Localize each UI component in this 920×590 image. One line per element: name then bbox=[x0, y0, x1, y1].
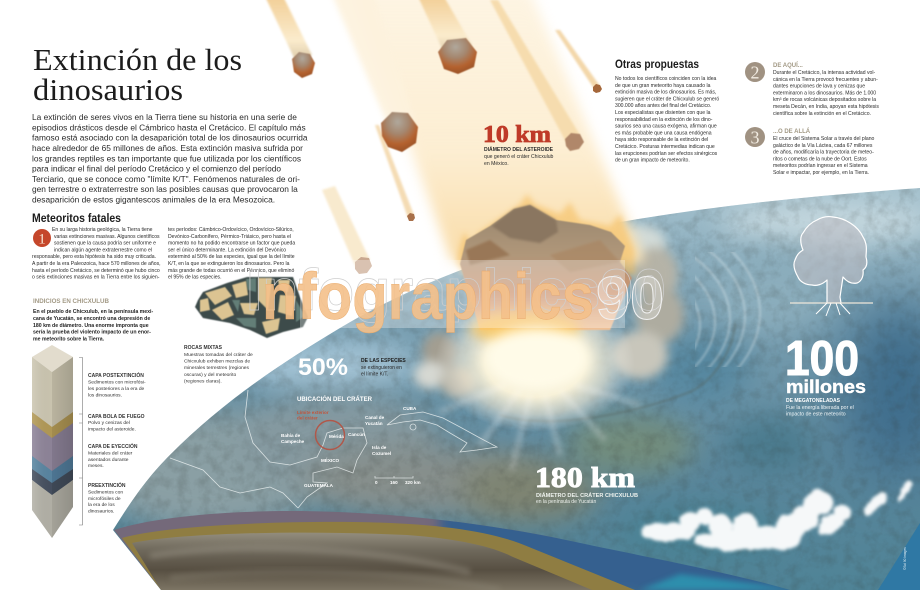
stratigraphic column bbox=[32, 345, 73, 538]
title bbox=[33, 42, 242, 107]
bracket for column layers bbox=[79, 358, 82, 525]
text column 1: hasta el período Cretácico, se determinó que hubo cinco bbox=[32, 268, 160, 274]
icon: number 1 badge bbox=[33, 229, 51, 248]
crater circle bbox=[316, 420, 344, 450]
text: Rocas mixtas: minerales terrestres (regiones bbox=[184, 365, 250, 371]
callout: 180 km: en la península de Yucatán bbox=[536, 499, 596, 505]
callout: 100 millones: Fue la energía liberada por el bbox=[786, 405, 854, 411]
intro text block: desaparición de estos gigantescos animales de la era Mesozoica. bbox=[32, 194, 275, 204]
place labels: GUATEMALA bbox=[304, 483, 334, 488]
text: De aquí: cánica en la Tierra provocó frecuentes y abun- bbox=[773, 77, 878, 83]
label: preextinción: PREEXTINCIÓN bbox=[88, 481, 126, 489]
panel: Earth surface with ocean and land bbox=[90, 180, 920, 590]
label: capa postextinción: los dinosaurios. bbox=[88, 392, 122, 398]
text: Rocas mixtas: (regiones claras). bbox=[184, 378, 222, 384]
place labels: 320 km bbox=[405, 480, 421, 485]
rock sample: mixed rocks bbox=[195, 277, 308, 338]
text column 2: ser el único determinante. La extinción del Devónico bbox=[168, 247, 286, 253]
place labels: Cancún bbox=[348, 432, 365, 437]
place labels: MÉXICO bbox=[321, 456, 340, 463]
intro text block: episodios drásticos desde el Cámbrico hasta el Cretácico. El capítulo más bbox=[32, 122, 306, 132]
label: preextinción: la era de los bbox=[88, 502, 115, 508]
watermark band and text: nfographics bbox=[262, 259, 594, 333]
icon: number 2 badge: 2 bbox=[750, 62, 760, 82]
text: O de allá: de años, modificaría la trayectoria de meteo- bbox=[773, 150, 874, 156]
label: capa de eyección: Materiales del cráter bbox=[88, 450, 133, 456]
label: preextinción: microfósiles de bbox=[88, 496, 121, 502]
text: Rocas mixtas bbox=[0, 0, 260, 384]
crater limit label: del cráter bbox=[297, 416, 318, 420]
text column 2: tes períodos: Cámbrico-Ordovícico, Ordovícico-Silúrico, bbox=[168, 227, 294, 233]
label: capa de eyección bbox=[88, 442, 138, 469]
light beams of falling asteroids bbox=[262, 0, 645, 268]
text: Otras propuestas: responsabilidad en la extinción de los dino- bbox=[615, 117, 713, 123]
label: capa bola de fuego: impacto del asteroide. bbox=[88, 426, 136, 432]
icon: meteor 3 bbox=[438, 38, 477, 74]
text column 2: el 95% de las especies. bbox=[168, 275, 222, 281]
place labels: Yucatán bbox=[365, 421, 383, 426]
watermark band and text: Infographics90 bbox=[246, 258, 666, 323]
icon: meteor 5 bbox=[593, 84, 602, 93]
place labels: Cozumel bbox=[372, 451, 391, 456]
text: De aquí: científica sobre la extinción en el Cretácico. bbox=[773, 111, 871, 117]
crater rim bbox=[500, 323, 735, 421]
label: capa de eyección: asentados durante bbox=[88, 457, 129, 463]
intro text block: hace alrededor de 65 millones de años. Esta extinción masiva sufrida por bbox=[32, 143, 303, 153]
callout: 100 millones: 100 bbox=[785, 332, 859, 386]
callout: 180 km: DIÁMETRO DEL CRÁTER CHICXULUB bbox=[536, 492, 638, 499]
impact explosion bbox=[440, 312, 628, 430]
map heading: UBICACIÓN DEL CRÁTER bbox=[297, 395, 373, 403]
smoke clouds bbox=[414, 225, 684, 398]
text column 1: responsable, pero esta hipótesis ha sido muy criticada. bbox=[32, 254, 156, 260]
label: capa bola de fuego: CAPA BOLA DE FUEGO bbox=[88, 414, 145, 420]
text: De aquí: Durante el Cretácico, la intensa actividad vol- bbox=[773, 70, 876, 76]
text: Otras propuestas: es más probable que una causa endógena bbox=[615, 130, 712, 136]
heading: De aquí: DE AQUÍ... bbox=[773, 61, 803, 69]
text: O de allá: meteoritos podrían ingresar en el Sistema bbox=[773, 163, 868, 169]
text column 2: Devónico-Carbonífero, Pérmico-Triásico, pero hasta el bbox=[168, 234, 291, 240]
label: preextinción: Sedimentos con bbox=[88, 489, 123, 495]
callout: 50 percent: 50% bbox=[298, 354, 348, 381]
text: Chicxulub description: me meteorito sobre la Tierra. bbox=[33, 336, 105, 342]
icon: mushroom cloud bbox=[790, 217, 873, 316]
callout: 100 millones: DE MEGATONELADAS bbox=[786, 398, 841, 404]
text: Chicxulub description: 180 km de diámetro. Una enorme impronta que bbox=[33, 323, 149, 329]
callout: 100 millones bbox=[785, 332, 866, 418]
intro text block: para indicar el final del período Cretácico y el comienzo del período bbox=[32, 164, 281, 174]
title: dinosaurios bbox=[33, 72, 183, 107]
text column 1: indican algún agente extraterrestre como el bbox=[54, 247, 152, 253]
intro text block: Terciario, que se conoce como "límite K/T". Fenómenos naturales de ori- bbox=[32, 174, 300, 184]
crater limit label: Límite exterior bbox=[297, 410, 329, 415]
text: O de allá: ritos o cometas de la nube de Oort. Estos bbox=[773, 156, 867, 162]
callout: 180 km bbox=[535, 463, 638, 505]
text: De aquí: meseta Decán, en India, apoyan esta hipótesis bbox=[773, 104, 879, 110]
heading: Indicios en Chicxulub: INDICIOS EN CHICXULUB bbox=[33, 299, 110, 305]
fireball below the asteroid bbox=[470, 312, 580, 344]
text: Otras propuestas: haya sido responsable de la extinción del bbox=[615, 137, 708, 143]
intro text block: los grandes reptiles es tan importante que fue utilizada por los científicos bbox=[32, 153, 301, 163]
callout: 50 percent: DE LAS ESPECIES bbox=[361, 358, 406, 364]
icon: number 3 badge: 3 bbox=[750, 128, 760, 148]
place labels: Isla de bbox=[372, 445, 386, 450]
text: De aquí: exterminaron a los dinosaurios. Más de 1.000 bbox=[773, 90, 876, 96]
text: Chicxulub description: sería la prueba del violento impacto de un enor- bbox=[33, 330, 151, 336]
icon: number 3 badge bbox=[745, 127, 765, 148]
text: Otras propuestas: Los especialistas que disienten con que la bbox=[615, 110, 711, 116]
text: De aquí: km³ de rocas volcánicas depositados sobre la bbox=[773, 97, 876, 103]
text: O de allá: Solar e impactar, por ejemplo, en la Tierra. bbox=[773, 170, 869, 176]
text: Rocas mixtas: Muestras tomadas del cráter de bbox=[184, 352, 253, 358]
place labels: Canal de bbox=[365, 415, 384, 420]
label: capa bola de fuego bbox=[88, 414, 145, 432]
callout: 100 millones: millones bbox=[786, 377, 866, 397]
intro text block: famoso está asociado con la desaparición total de los dinosaurios ocurrida bbox=[32, 133, 308, 143]
icon: number 2 badge bbox=[745, 62, 765, 82]
map of crater location bbox=[170, 390, 497, 508]
callout: 10 km: DIÁMETRO DEL ASTEROIDE bbox=[484, 146, 554, 153]
text: Chicxulub description: En el pueblo de Chicxulub, en la península mexi- bbox=[33, 309, 153, 315]
text: O de allá: El cruce del Sistema Solar a través del plano bbox=[773, 136, 875, 142]
icon: number 1 badge: 1 bbox=[38, 232, 46, 248]
text column 1: En su larga historia geológica, la Tierra tiene bbox=[52, 227, 153, 233]
place labels: CUBA bbox=[403, 406, 417, 411]
heading: O de allá: ...O DE ALLÁ bbox=[773, 128, 811, 135]
fireball core bbox=[485, 328, 589, 388]
text column 2: más grande de todas ocurrió en el Pérmico, que eliminó bbox=[168, 268, 294, 274]
credit: ©Sol 90 Images bbox=[903, 547, 907, 570]
icon: meteor 7 bbox=[355, 257, 372, 274]
label: preextinción bbox=[88, 481, 126, 514]
text: Otras propuestas: saurios sea una causa exógena, afirman que bbox=[615, 124, 717, 130]
label: capa postextinción: Sedimentos con microfósi- bbox=[88, 379, 146, 385]
intro text block: gen terrestre o extraterrestre son las posibles causas que provocaron la bbox=[32, 184, 298, 194]
text: Otras propuestas: 300.000 años antes del final del Cretácico. bbox=[615, 103, 711, 109]
text: Otras propuestas: extinción masiva de los dinosaurios. Es más, bbox=[615, 90, 716, 96]
place labels: Bahía de bbox=[281, 433, 300, 438]
text column 2: exterminó al 50% de las especies, igual que la del límite bbox=[168, 254, 295, 260]
icon: meteor 4 bbox=[565, 133, 584, 151]
text: Otras propuestas: No todos los científicos coinciden con la idea bbox=[615, 76, 717, 82]
ripple rings bbox=[695, 252, 762, 367]
large asteroid bbox=[460, 205, 632, 330]
label: capa postextinción: les posteriores a la era de bbox=[88, 386, 145, 392]
text: Otras propuestas: Cretácico. Posturas intermedias indican que bbox=[615, 144, 715, 150]
text: Chicxulub description: cana de Yucatán, se encontró una depresión de bbox=[33, 316, 150, 322]
callout: 50 percent: se extinguieron en bbox=[361, 365, 402, 371]
text: Rocas mixtas: Chicxulub exhiben mezclas de bbox=[184, 359, 250, 365]
text: Otras propuestas: sugieren que el cráter de Chicxulub se generó bbox=[615, 96, 719, 102]
place labels bbox=[281, 406, 421, 488]
text: De aquí: dantes erupciones de lava y cenizas que bbox=[773, 84, 865, 90]
text column 2: K/T, en la que se extinguieron los dinosaurios. Pero la bbox=[168, 261, 290, 267]
text: O de allá: galáctico de la Vía Láctea, cada 67 millones bbox=[773, 143, 873, 149]
callout: 50 percent: el límite K/T. bbox=[361, 371, 388, 377]
place labels: 160 bbox=[390, 480, 398, 485]
text column 1: varias extinciones masivas. Algunos científicos bbox=[54, 234, 160, 240]
icon: meteor 2 bbox=[381, 112, 418, 152]
text column 1: sostienen que la causa podría ser uniforme e bbox=[54, 241, 156, 247]
place labels: 0 bbox=[375, 480, 378, 485]
heading: Otras propuestas: Otras propuestas bbox=[615, 57, 699, 71]
text column 2: momento no ha podido encontrarse un factor que pueda bbox=[168, 241, 295, 247]
callout: 10 km bbox=[483, 122, 554, 167]
label: capa bola de fuego: Polvo y cenizas del bbox=[88, 420, 130, 426]
text: Otras propuestas: de que un gran meteorito haya causado la bbox=[615, 83, 711, 89]
text column 1: A partir de la era Paleozoica, hace 570 millones de años, bbox=[32, 261, 161, 267]
text column 1: o seis extinciones masivas en la Tierra entre los siguien- bbox=[32, 275, 160, 281]
label: capa de eyección: CAPA DE EYECCIÓN bbox=[88, 442, 138, 450]
callout: 100 millones: impacto de este meteorito bbox=[786, 412, 846, 418]
text: Rocas mixtas: oscuras) y del meteorito bbox=[184, 372, 236, 378]
place labels: Mérida bbox=[329, 434, 344, 439]
heading: Meteoritos fatales: Meteoritos fatales bbox=[32, 211, 121, 225]
icon: meteor 1 bbox=[292, 52, 315, 78]
clouds bottom right bbox=[640, 480, 916, 555]
callout: 10 km: que generó el cráter Chicxulub bbox=[484, 154, 553, 160]
label: capa de eyección: meses. bbox=[88, 464, 104, 469]
callout: 10 km: 10 km bbox=[483, 122, 551, 148]
title: Extinción de los bbox=[33, 42, 242, 77]
text: Rocas mixtas: ROCAS MIXTAS bbox=[184, 345, 223, 351]
label: preextinción: dinosaurios. bbox=[88, 508, 114, 514]
watermark band and text: 90 bbox=[596, 265, 664, 332]
label: capa postextinción bbox=[88, 371, 146, 398]
text: Otras propuestas: de un gran impacto de meteorito. bbox=[615, 158, 690, 164]
flame around the large asteroid bbox=[456, 194, 636, 285]
text: Otras propuestas: las erupciones podrían ser efectos sinérgicos bbox=[615, 151, 718, 157]
callout: 180 km: 180 km bbox=[535, 463, 635, 494]
callout: 10 km: en México. bbox=[484, 161, 509, 167]
icon: meteor 6 bbox=[407, 213, 415, 221]
intro text block: La extinción de seres vivos en la Tierra tiene su historia en una serie de bbox=[32, 112, 297, 122]
callout: 50 percent bbox=[298, 354, 406, 381]
label: capa postextinción: CAPA POSTEXTINCIÓN bbox=[88, 371, 144, 379]
surface cross-section strata bbox=[100, 505, 920, 590]
place labels: Campeche bbox=[281, 439, 305, 444]
